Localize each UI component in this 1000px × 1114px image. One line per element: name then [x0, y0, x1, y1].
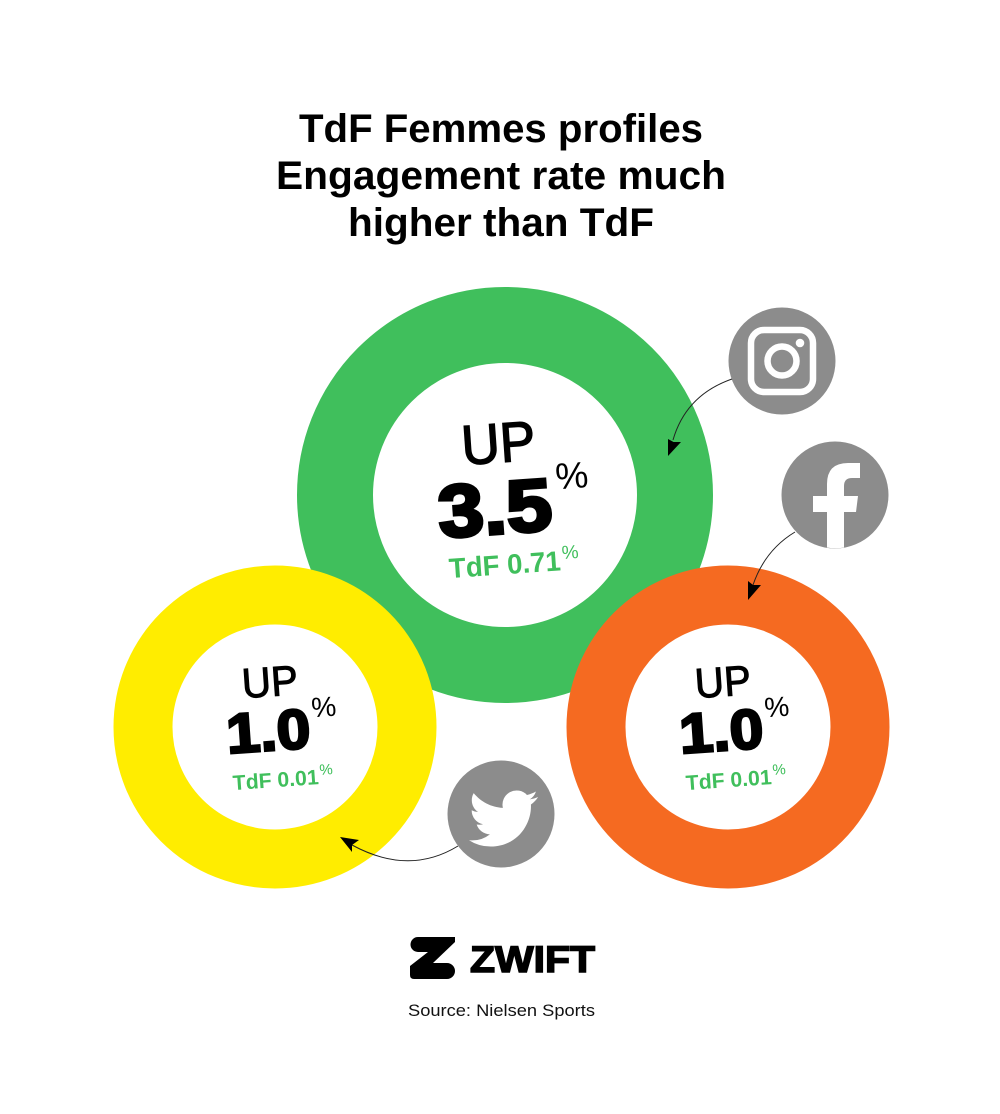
logo mark: [410, 937, 455, 979]
logo wordmark: ZWIFT: [470, 939, 595, 980]
icon: Facebook: [782, 442, 888, 548]
Facebook stat text: %: [763, 691, 790, 723]
Facebook stat text: TdF 0.01: [685, 766, 773, 795]
source note: Source: Nielsen Sports: [408, 1001, 595, 1020]
Facebook stat text: %: [772, 761, 786, 779]
title: [276, 107, 726, 245]
Instagram stat text: %: [561, 542, 579, 564]
Instagram stat text: %: [554, 454, 590, 497]
panel: Instagram green ring: [335, 325, 675, 665]
Instagram stat text: TdF 0.71: [448, 545, 562, 584]
title: higher than TdF: [348, 201, 654, 245]
panel: Facebook orange ring: [596, 595, 860, 859]
Instagram stat text: UP: [459, 409, 537, 477]
title: Engagement rate much: [276, 154, 726, 198]
logo: Zwift: [410, 937, 595, 980]
panel: Twitter yellow ring: [143, 595, 407, 859]
Facebook stat text: UP: [693, 656, 752, 707]
icon: Instagram: [728, 308, 836, 414]
Twitter stat text: %: [319, 761, 333, 779]
Twitter stat text: 1.0: [224, 697, 312, 765]
arrow: Twitter to yellow ring: [340, 837, 458, 861]
icon: Twitter: [448, 760, 554, 868]
arrow: Instagram to green ring: [668, 379, 732, 456]
Twitter stat text: %: [310, 691, 337, 723]
Twitter stat text: TdF 0.01: [232, 766, 320, 795]
Facebook stat text: [674, 654, 795, 795]
title: TdF Femmes profiles: [299, 107, 703, 151]
Instagram stat text: [431, 405, 595, 585]
arrow: Facebook to orange ring: [748, 532, 795, 600]
Twitter stat text: UP: [240, 656, 299, 707]
Twitter stat text: [221, 654, 342, 795]
Instagram stat text: 3.5: [435, 463, 555, 554]
Facebook stat text: 1.0: [677, 697, 765, 765]
